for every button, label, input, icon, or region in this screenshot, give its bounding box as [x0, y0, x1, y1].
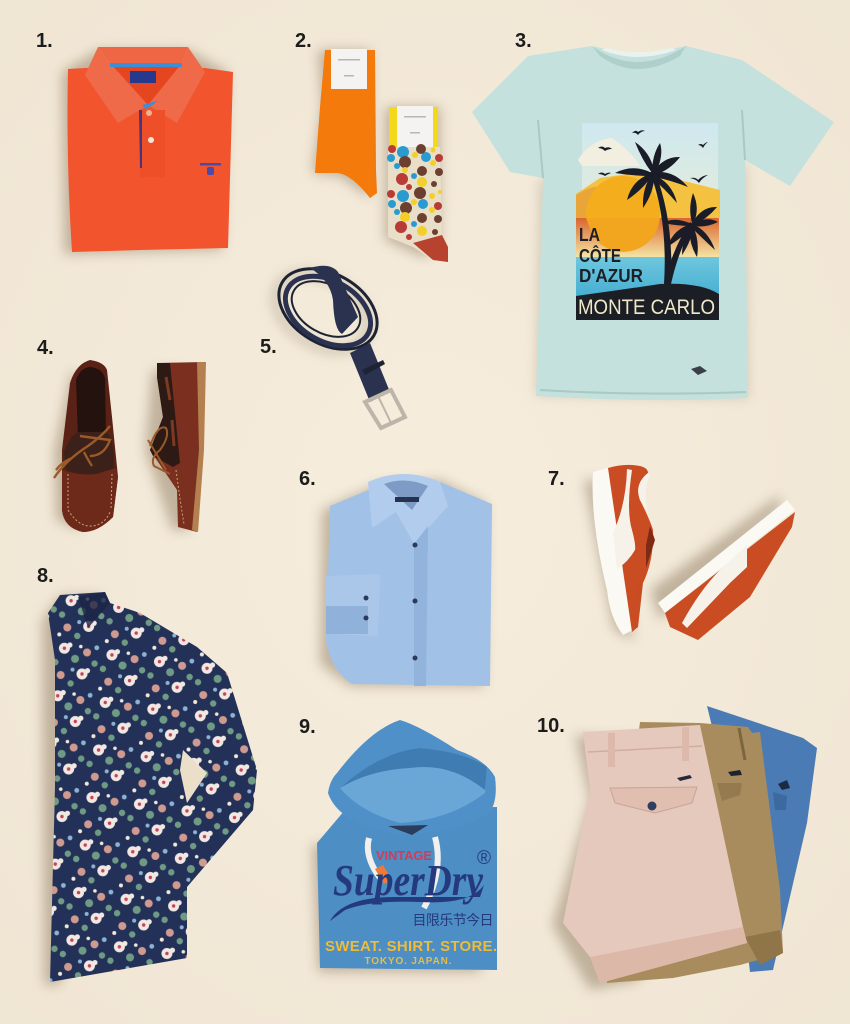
collar [85, 47, 205, 123]
pink shorts [563, 725, 747, 983]
t-shirt graphic: D'AZUR [579, 266, 643, 286]
item 9: hoodie: SWEAT. SHIRT. STORE. [325, 938, 497, 955]
t-shirt graphic: LA [579, 225, 600, 245]
number 7: 7. [548, 468, 565, 490]
number 2: 2. [295, 30, 312, 52]
sleeve gap [180, 750, 207, 803]
placket [140, 110, 165, 177]
number 4: 4. [37, 337, 54, 359]
item 9: hoodie: ® [477, 848, 491, 869]
orange sock [312, 49, 377, 198]
number 8: 8. [37, 565, 54, 587]
item 6: linen shirt [320, 474, 492, 686]
number 1: 1. [36, 30, 53, 52]
item 7: suede sneakers [584, 465, 795, 640]
left shoe [54, 360, 118, 532]
right sneaker [650, 495, 795, 640]
polka dot sock [385, 106, 448, 262]
palm trees [615, 142, 718, 284]
item 2: socks [312, 49, 448, 262]
item 9: hoodie: TOKYO. JAPAN. [364, 956, 452, 967]
t-shirt graphic: MONTE CARLO [578, 296, 715, 319]
item 10: stacked chino shorts [552, 706, 817, 990]
item 9: hoodie [312, 720, 497, 972]
khaki shorts [607, 722, 783, 983]
drawstrings [368, 837, 438, 908]
item 9: hoodie: VINTAGE [376, 848, 432, 863]
right shoe [145, 362, 206, 532]
item 9: hoodie: 目限乐节今日 [412, 910, 494, 930]
item 5: belt [262, 252, 405, 428]
item 1: orange polo shirt [62, 47, 233, 254]
number 9: 9. [299, 716, 316, 738]
number 6: 6. [299, 468, 316, 490]
hood [328, 720, 496, 835]
left sneaker [584, 465, 655, 640]
item 9: hoodie: SuperDry [333, 856, 483, 905]
number 3: 3. [515, 30, 532, 52]
number 5: 5. [260, 336, 277, 358]
number 10: 10. [537, 715, 565, 737]
t-shirt graphic [576, 123, 720, 320]
item 4: boat shoes [54, 360, 206, 532]
script swoosh [330, 885, 484, 921]
t-shirt graphic: CÔTE [579, 245, 621, 266]
item 8: floral shirt [42, 592, 257, 985]
item 3: t-shirt [472, 46, 834, 400]
blue shorts [707, 706, 817, 972]
